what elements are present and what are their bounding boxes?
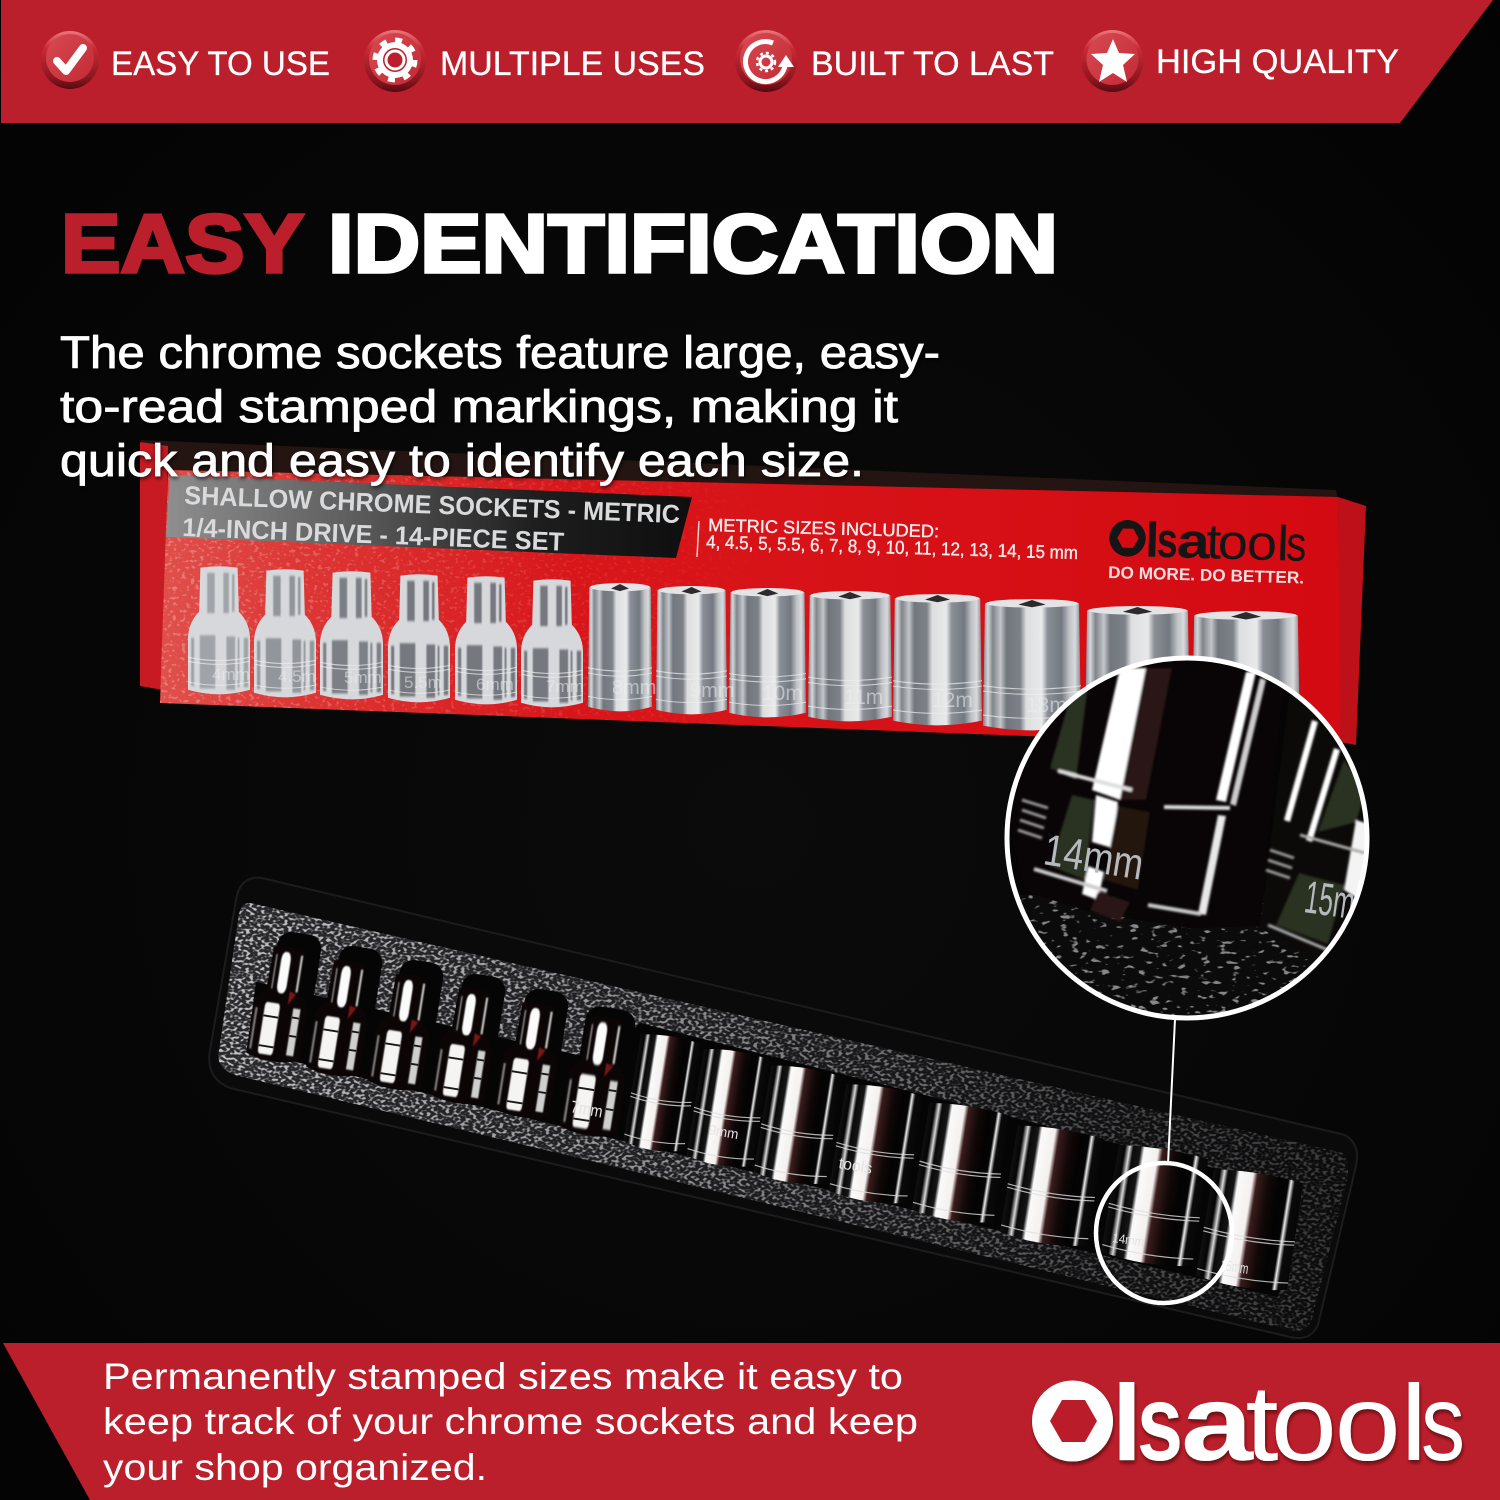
intro paragraph: quick and easy to identify each size. [60, 435, 864, 486]
box socket illustrations: 6mm [476, 675, 514, 694]
box socket illustrations: 13m [1026, 694, 1067, 717]
box left flap [140, 442, 168, 690]
benefit: easy to use: EASY TO USE [111, 45, 330, 83]
bottom description text [103, 1356, 918, 1488]
icon: check badge [41, 31, 99, 89]
box metric sizes text [697, 515, 1078, 563]
benefit: multiple uses [364, 30, 705, 92]
tray leather texture [218, 903, 1348, 1331]
Olsatools logo [1032, 1359, 1465, 1484]
box socket illustrations: 7mm [546, 677, 584, 696]
box front face [160, 470, 1342, 748]
Olsatools logo: s [1421, 1362, 1465, 1483]
callout connector line [1168, 1019, 1175, 1164]
tray sockets: tools [837, 1155, 874, 1178]
tray sockets: 15mm [1219, 1257, 1250, 1278]
Olsatools logo: O [1033, 1359, 1113, 1484]
box title strip [166, 475, 692, 558]
bottom red banner [3, 1343, 1500, 1500]
tray raised outer edge [209, 878, 1357, 1338]
box logo: a [1176, 513, 1211, 569]
heading [61, 197, 1058, 290]
magnified 15mm socket body [1262, 895, 1350, 956]
box logo: s [1286, 516, 1307, 572]
box right flap [1338, 497, 1366, 745]
box socket illustrations: 10m [762, 682, 803, 705]
box socket illustrations: 11m [844, 686, 883, 709]
foam tray with sockets [200, 878, 1370, 1350]
benefit: built to last: BUILT TO LAST [811, 45, 1054, 83]
bottom description text: Permanently stamped sizes make it easy to [103, 1356, 903, 1397]
box socket illustrations [188, 566, 1300, 744]
bottom description text: your shop organized. [103, 1447, 487, 1488]
benefit: high quality [1082, 30, 1399, 92]
box logo: tool [1206, 513, 1290, 571]
heading: IDENTIFICATION [328, 197, 1058, 290]
box title strip: 1/4-INCH DRIVE - 14-PIECE SET [182, 512, 565, 557]
icon: star badge [1082, 30, 1144, 92]
box socket illustrations: 5mm [344, 668, 382, 687]
box metric sizes text: 4, 4.5, 5, 5.5, 6, 7, 8, 9, 10, 11, 12, 13, 14, 15 mm [706, 531, 1078, 563]
bottom description text: keep track of your chrome sockets and keep [103, 1401, 918, 1442]
box lid edge [140, 440, 1338, 498]
tray sockets: 14mm [1112, 1230, 1145, 1249]
box metric sizes text: METRIC SIZES INCLUDED: [708, 515, 939, 541]
benefit: easy to use [41, 31, 330, 89]
magnified chrome highlights [1018, 668, 1372, 955]
magnified 14mm socket body [1050, 895, 1262, 928]
product box with printed panel [140, 440, 1366, 748]
Olsatools logo: l [1112, 1362, 1142, 1483]
callout ring on 14mm socket [1096, 1163, 1232, 1303]
box socket illustrations: 8mm [612, 677, 656, 699]
tray sockets: 9mm [707, 1121, 740, 1142]
icon: cycle gear badge [735, 30, 797, 92]
intro paragraph: The chrome sockets feature large, easy- [60, 327, 940, 378]
Olsatools logo: s [1137, 1362, 1183, 1483]
benefit: high quality: HIGH QUALITY [1156, 43, 1399, 81]
box socket illustrations: 9mm [690, 680, 734, 702]
heading: EASY [61, 197, 304, 290]
tray sockets: 7mm [569, 1097, 604, 1121]
Olsatools logo: tool [1246, 1363, 1427, 1484]
box logo: O [1109, 509, 1147, 567]
box socket illustrations: 4mm [212, 665, 250, 684]
tray sockets [245, 943, 1304, 1294]
box socket illustrations: 12m [932, 689, 973, 712]
magnified size stamps [1044, 836, 1354, 918]
box socket illustrations: 5.5m [404, 673, 442, 692]
box logo: DO MORE. DO BETTER. [1108, 563, 1304, 587]
box logo: s [1156, 513, 1179, 568]
box logo: l [1145, 512, 1160, 568]
Olsatools logo: a [1181, 1362, 1254, 1483]
magnified size stamps: 14mm [1040, 825, 1147, 890]
box logo [1108, 509, 1307, 587]
magnified socket detail [1002, 650, 1400, 1020]
icon: gear badge [364, 30, 426, 92]
box title strip: SHALLOW CHROME SOCKETS - METRIC [184, 480, 681, 529]
top red banner [1, 0, 1493, 123]
box socket illustrations: 4.5m [278, 667, 316, 686]
benefit: built to last [735, 30, 1054, 92]
benefit: multiple uses: MULTIPLE USES [440, 45, 705, 83]
magnified size stamps: 15m [1302, 870, 1358, 929]
intro paragraph [60, 327, 940, 486]
intro paragraph: to-read stamped markings, making it [60, 381, 899, 432]
box gloss texture [160, 470, 695, 723]
magnified leather texture [1021, 895, 1310, 1015]
tray socket well [247, 930, 1300, 1297]
